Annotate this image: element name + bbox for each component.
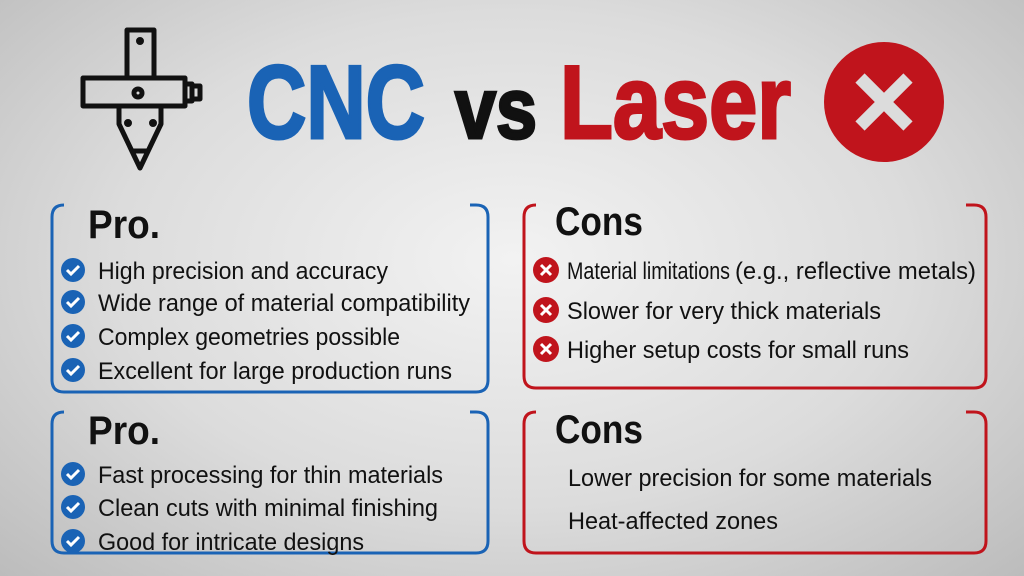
list: laser pros: Good for intricate designs <box>98 529 364 556</box>
list: cnc cons: Slower for very thick materials <box>567 298 881 325</box>
list: laser cons: Heat-affected zones <box>568 508 778 535</box>
list: laser pros: Clean cuts with minimal finishing <box>98 495 438 522</box>
list: laser cons <box>568 465 932 535</box>
panel: laser pros <box>52 409 488 556</box>
list: cnc pros: Complex geometries possible <box>98 324 400 351</box>
heading: cons: Cons <box>555 408 643 452</box>
list: laser pros: Fast processing for thin materials <box>98 462 443 489</box>
panel: laser cons <box>524 408 986 553</box>
panel: cnc pros <box>52 203 488 392</box>
title: vs <box>455 61 537 157</box>
heading: pro: Pro. <box>88 203 160 247</box>
list: cnc cons: (e.g., reflective metals) <box>735 258 976 285</box>
icon: red x circle <box>824 42 944 162</box>
list: cnc cons <box>533 257 976 364</box>
list: laser cons: Lower precision for some materials <box>568 465 932 492</box>
list: cnc pros: Wide range of material compatibility <box>98 290 470 317</box>
title: Laser <box>560 45 791 161</box>
list: cnc pros <box>61 258 470 385</box>
heading: cons: Cons <box>555 200 643 244</box>
panel: cnc cons <box>524 200 986 388</box>
list: cnc pros: Excellent for large production runs <box>98 358 452 385</box>
heading: pro: Pro. <box>88 409 160 453</box>
title: CNC <box>247 45 425 161</box>
list: cnc cons: Higher setup costs for small runs <box>567 337 909 364</box>
list: cnc cons: Material limitations <box>567 258 730 285</box>
list: cnc pros: High precision and accuracy <box>98 258 388 285</box>
title <box>247 45 791 161</box>
list: laser pros <box>61 462 443 556</box>
icon: cnc tool head <box>83 30 200 168</box>
